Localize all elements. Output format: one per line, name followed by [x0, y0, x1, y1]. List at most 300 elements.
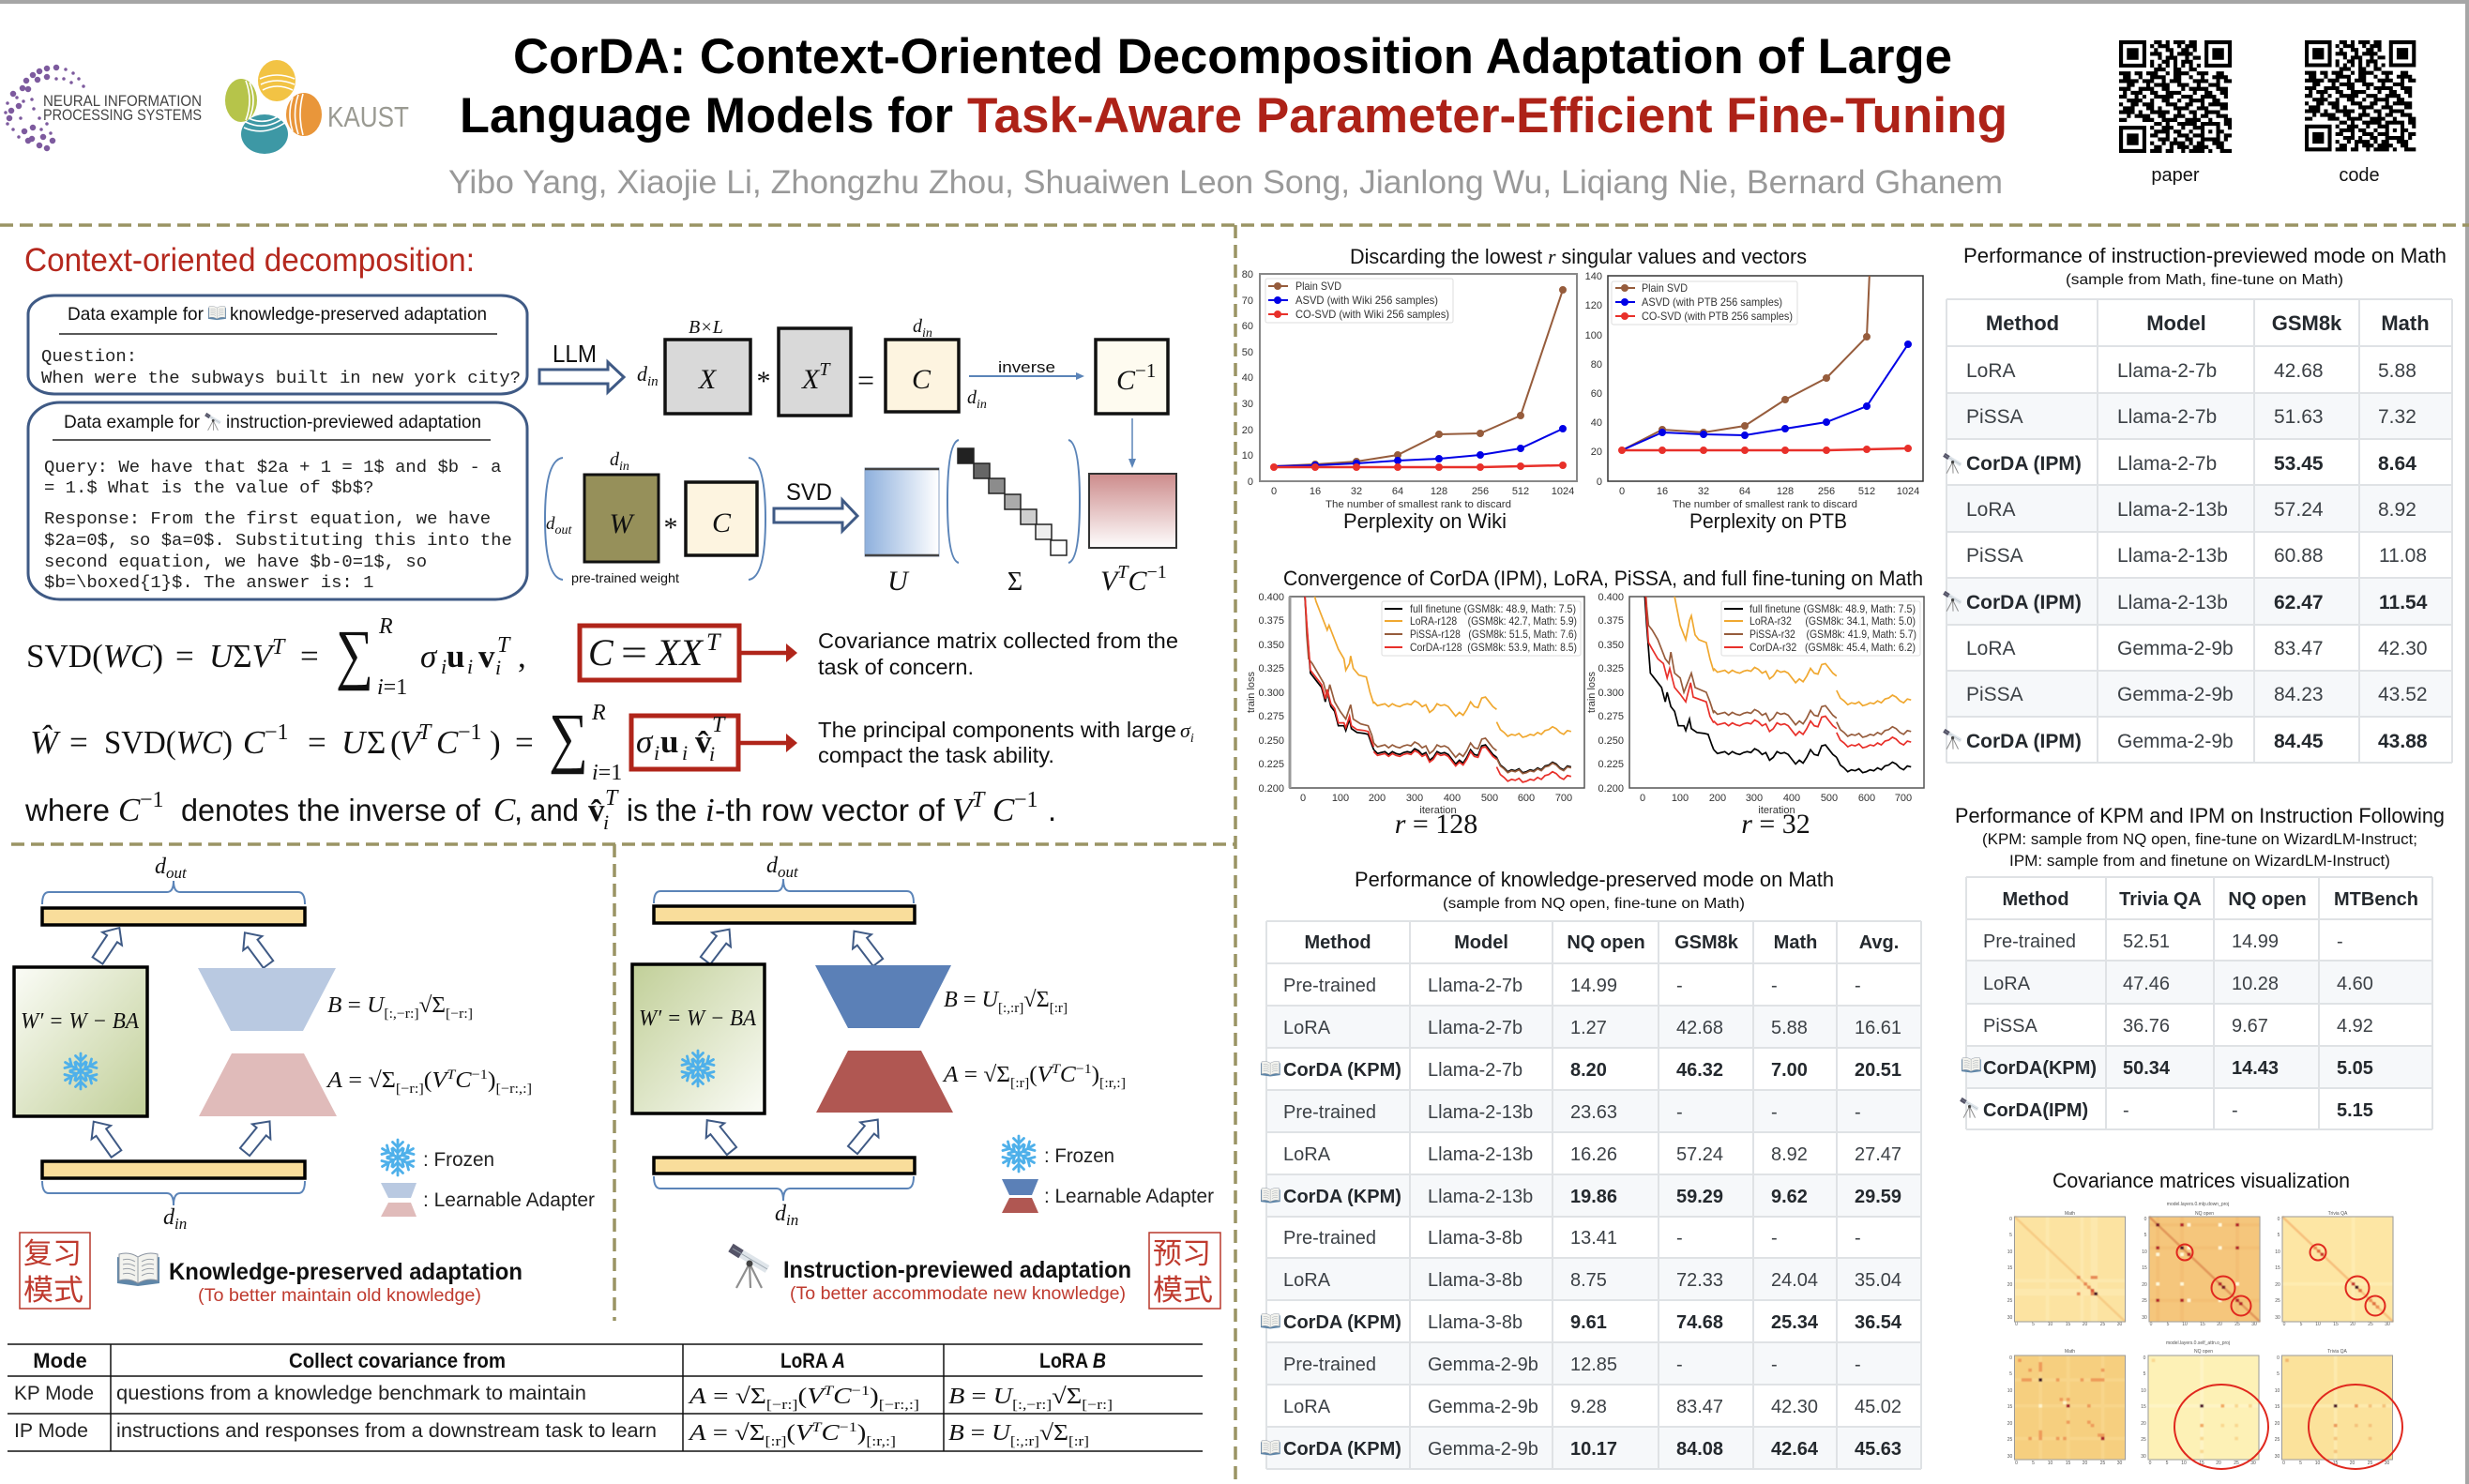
table: knowledge-preserved mode on Math: -: [1676, 1228, 1683, 1249]
title: Task-Aware Parameter-Efficient Fine-Tuning: [967, 88, 2007, 144]
text: where line: C: [493, 792, 516, 828]
panel: knowledge-preserved adaptation diagram: (: [424, 1068, 432, 1093]
table: instruction-previewed mode on Math: 8.92: [2378, 499, 2416, 521]
table: knowledge-preserved mode on Math: Pre-trained: [1283, 976, 1376, 996]
chart: perplexity on PTB: 100: [1585, 330, 1602, 341]
badge: review mode: 模式: [23, 1274, 83, 1307]
callout box: C = XX^T: C: [588, 631, 614, 674]
equation: adapted W: T: [418, 720, 432, 745]
diagram: SVD decomposition: SVD: [786, 479, 832, 506]
table: instruction following: 5.15: [2337, 1100, 2373, 1121]
equation: adapted W: ): [490, 724, 501, 761]
text: where line: T: [605, 786, 619, 810]
heatmap: NQ open row 2: [2141, 1349, 2259, 1466]
panel: instruction-previewed data example: Response: From the first equation, we have: [44, 508, 491, 529]
icon: telescope: [731, 1248, 767, 1288]
arrow: principal components callout: [740, 734, 797, 752]
table: instruction-previewed mode on Math: 5.88: [2378, 360, 2416, 382]
table: mode comparison: (: [786, 1421, 795, 1446]
text: where line: .: [1048, 793, 1056, 827]
chart: perplexity on PTB: 20: [1591, 447, 1602, 458]
logo: NeurIPS: [6, 68, 202, 148]
panel: instruction-previewed data example: Query: We have that $2a + 1 = 1$ and $b - a: [44, 457, 501, 477]
table: mode comparison: [−r:]: [766, 1398, 797, 1413]
chart: convergence r=32: 0.225: [1598, 759, 1624, 770]
diagram: SVD decomposition: U: [887, 566, 910, 597]
table: knowledge-preserved mode on Math: 25.34: [1771, 1312, 1819, 1333]
table: mode comparison: [−r:,:]: [879, 1398, 919, 1413]
diagram: covariance computation: d: [637, 362, 647, 386]
table: mode comparison: [:,:r]: [1010, 1434, 1039, 1449]
table: knowledge-preserved mode on Math: Llama-3-8b: [1428, 1312, 1522, 1333]
table: knowledge-preserved mode on Math: -: [1855, 976, 1861, 996]
table: knowledge-preserved mode on Math: CorDA (KPM): [1283, 1439, 1401, 1460]
table: instruction-previewed mode on Math: 42.30: [2378, 638, 2428, 659]
table: instruction-previewed mode on Math: PiSSA: [1966, 684, 2023, 705]
chart: perplexity on PTB: 40: [1591, 417, 1602, 429]
badge: preview mode: [1149, 1233, 1220, 1309]
table: knowledge-preserved mode on Math: -: [1676, 1355, 1683, 1375]
chart: perplexity on PTB: [1585, 271, 1923, 533]
callout box: sigma u v-hat: v̂: [695, 723, 712, 760]
table: instruction following: 4.60: [2337, 974, 2373, 994]
table: mode comparison: T: [824, 1384, 835, 1399]
table: knowledge-preserved mode on Math: LoRA: [1283, 1144, 1331, 1165]
table: knowledge-preserved mode on Math: 16.61: [1855, 1018, 1901, 1038]
chart: perplexity on PTB: 1024: [1897, 486, 1919, 497]
table: knowledge-preserved mode on Math: 83.47: [1676, 1397, 1723, 1417]
table: instruction-previewed mode on Math: 53.45: [2274, 453, 2324, 475]
table: mode comparison: √Σ: [1039, 1421, 1068, 1446]
table: instruction following: 36.76: [2123, 1016, 2170, 1037]
chart: convergence r=128: CorDA-r128 (GSM8k: 53.9, Math: 8.5): [1410, 641, 1577, 654]
heading: instruction following table: [1955, 804, 2445, 870]
chart: perplexity on Wiki: Plain SVD: [1295, 280, 1341, 293]
label: heatmap row 1 title: model.layers.0.mlp.down_proj: [2167, 1202, 2229, 1207]
table: mode comparison: [:r]: [1068, 1434, 1089, 1449]
heatmap: Math row 2: [2007, 1349, 2126, 1466]
text: principal components explanation: σ: [1180, 719, 1190, 742]
chart: convergence r=32: r = 32: [1741, 809, 1810, 840]
QR code: paper: [2119, 40, 2232, 153]
table: knowledge-preserved mode on Math: 9.61: [1570, 1312, 1607, 1333]
table: knowledge-preserved mode on Math: 5.88: [1771, 1018, 1808, 1038]
panel: instruction-previewed data example: instruction-previewed adaptation: [226, 412, 481, 432]
chart: perplexity on Wiki: Perplexity on Wiki: [1343, 509, 1507, 533]
table: knowledge-preserved mode on Math: Llama-2-7b: [1428, 1060, 1522, 1081]
table: knowledge-preserved mode on Math: Pre-trained: [1283, 1102, 1376, 1123]
equation: adapted W: V: [400, 724, 423, 761]
text: where line: V: [952, 792, 976, 828]
table: instruction-previewed mode on Math: 42.68: [2274, 360, 2324, 382]
chart: convergence r=128: 0: [1300, 793, 1306, 804]
table: knowledge-preserved mode on Math: -: [1855, 1228, 1861, 1249]
chart: perplexity on PTB: Perplexity on PTB: [1689, 509, 1847, 533]
callout box: sigma u v-hat: T: [712, 713, 726, 737]
text: where line: where: [24, 793, 110, 827]
chart: convergence r=128: full finetune (GSM8k: 48.9, Math: 7.5): [1410, 602, 1576, 615]
diagram: covariance computation: C: [1116, 365, 1135, 396]
chart: perplexity on PTB: 512: [1858, 486, 1875, 497]
table: instruction-previewed mode on Math: Model: [2146, 311, 2206, 335]
equation: SVD of WC: σ: [420, 638, 438, 674]
chart: convergence r=128: 0.400: [1258, 592, 1284, 603]
table: instruction following: CorDA(KPM): [1983, 1058, 2097, 1079]
title: Language Models for: [460, 88, 953, 144]
panel: instruction-previewed adaptation diagram: [:r]: [1010, 1076, 1029, 1091]
diagram: SVD decomposition: d: [546, 514, 555, 534]
table: instruction-previewed mode on Math: 57.24: [2274, 499, 2324, 521]
table: instruction following: Trivia QA: [2119, 889, 2202, 910]
text: where line: denotes the inverse of: [181, 793, 481, 827]
table: knowledge-preserved mode on Math: 1.27: [1570, 1018, 1607, 1038]
chart: convergence r=128: 0.375: [1258, 615, 1284, 627]
chart: convergence r=32: 0.350: [1598, 640, 1624, 651]
text: principal components explanation: The principal components with large: [818, 718, 1176, 742]
chart: perplexity on PTB: 16: [1657, 486, 1668, 497]
table: knowledge-preserved mode on Math: Llama-2-7b: [1428, 976, 1522, 996]
table: knowledge-preserved mode on Math: 42.68: [1676, 1018, 1723, 1038]
equation: adapted W: R: [591, 701, 606, 725]
table: mode comparison: questions from a knowledge benchmark to maintain: [116, 1383, 586, 1404]
table: knowledge-preserved mode on Math: -: [1771, 976, 1778, 996]
chart: perplexity on Wiki: 512: [1512, 486, 1529, 497]
chart: perplexity on PTB: 60: [1591, 388, 1602, 400]
equation: adapted W: −1: [458, 720, 482, 745]
table: knowledge-preserved mode on Math: Math: [1774, 932, 1817, 953]
logo: KAUST: KAUST: [327, 100, 409, 133]
table: instruction following: 47.46: [2123, 974, 2170, 994]
diagram: SVD decomposition: out: [555, 523, 572, 538]
panel: knowledge-preserved adaptation diagram: [−r:,:]: [496, 1082, 532, 1097]
chart: perplexity on PTB: 0: [1619, 486, 1625, 497]
heading: instruction-previewed table: Performance of instruction-previewed mode on Math: [1963, 244, 2446, 267]
QR label: paper: paper: [2151, 165, 2200, 186]
heading: knowledge-preserved table: Performance of knowledge-preserved mode on Math: [1355, 868, 1834, 891]
panel: instruction-previewed adaptation diagram: [:r]: [1050, 1001, 1068, 1016]
callout box: C = XX^T: XX: [655, 631, 704, 674]
panel: instruction-previewed adaptation diagram: : Learnable Adapter: [1044, 1186, 1214, 1207]
table: instruction following: -: [2232, 1100, 2238, 1121]
table: knowledge-preserved mode on Math: 14.99: [1570, 976, 1617, 996]
table: instruction-previewed mode on Math: 60.88: [2274, 545, 2324, 567]
table: knowledge-preserved mode on Math: -: [1855, 1102, 1861, 1123]
chart: convergence r=128: r = 128: [1395, 809, 1477, 840]
diagram: covariance computation: −1: [1135, 359, 1156, 382]
table: instruction-previewed mode on Math: CorDA (IPM): [1966, 453, 2082, 475]
table: knowledge-preserved mode on Math: 46.32: [1676, 1060, 1723, 1081]
table: knowledge-preserved mode on Math: LoRA: [1283, 1270, 1331, 1291]
text: where line: [24, 786, 1056, 834]
table: knowledge-preserved mode on Math: -: [1771, 1102, 1778, 1123]
chart: perplexity on Wiki: 32: [1351, 486, 1362, 497]
badge: review mode: [20, 1233, 90, 1309]
chart: perplexity on PTB: 80: [1591, 359, 1602, 371]
diagram: covariance computation: in: [647, 374, 659, 389]
diagram: covariance computation: T: [819, 359, 831, 380]
table: knowledge-preserved mode on Math: -: [1855, 1355, 1861, 1375]
table: instruction following: 14.99: [2232, 931, 2279, 952]
text: covariance explanation: Covariance matrix collected from the: [818, 628, 1178, 653]
table: knowledge-preserved mode on Math: 20.51: [1855, 1060, 1901, 1081]
diagram: covariance computation: inverse: [998, 359, 1055, 376]
chart: convergence r=32: 0.375: [1598, 615, 1624, 627]
chart: perplexity on Wiki: 256: [1472, 486, 1489, 497]
table: knowledge-preserved mode on Math: Pre-trained: [1283, 1228, 1376, 1249]
panel: knowledge-preserved data example: [28, 295, 527, 394]
table: knowledge-preserved mode on Math: 23.63: [1570, 1102, 1617, 1123]
equation: adapted W: SVD(WC): [104, 724, 233, 761]
QR label: code: code: [2339, 165, 2380, 186]
authors: Yibo Yang, Xiaojie Li, Zhongzhu Zhou, Shuaiwen Leon Song, Jianlong Wu, Liqiang Nie, Bernard Ghanem: [448, 164, 2003, 201]
chart: convergence r=32: iteration: [1758, 805, 1795, 816]
diagram: SVD decomposition: in: [619, 460, 629, 474]
table: instruction following: PiSSA: [1983, 1016, 2037, 1037]
table: knowledge-preserved mode on Math: 45.02: [1855, 1397, 1901, 1417]
panel: instruction-previewed data example: = 1.$ What is the value of $b$?: [44, 477, 373, 498]
equation: SVD of WC: =: [300, 638, 319, 674]
table: knowledge-preserved mode on Math: Llama-3-8b: [1428, 1228, 1522, 1249]
heatmap: NQ open row 1: NQ open: [2195, 1211, 2214, 1217]
annotation: red highlight circles: [2174, 1244, 2402, 1469]
callout box: C = XX^T: =: [621, 631, 647, 674]
badge: preview mode: 模式: [1153, 1274, 1213, 1307]
diagram: SVD decomposition: d: [610, 449, 619, 470]
panel: knowledge-preserved adaptation diagram: −1: [472, 1068, 488, 1083]
panel: knowledge-preserved adaptation diagram: d: [163, 1205, 174, 1230]
diagram: SVD decomposition: C: [712, 507, 732, 538]
chart: convergence r=32: 0.275: [1598, 711, 1624, 722]
diagram: SVD decomposition: T: [1117, 562, 1129, 583]
equation: SVD of WC: SVD(WC): [26, 638, 163, 674]
heatmap: NQ open row 1: [2142, 1211, 2260, 1327]
panel: instruction-previewed adaptation diagram: out: [778, 863, 799, 881]
panel: knowledge-preserved data example: knowledge-preserved adaptation: [230, 304, 487, 325]
table: knowledge-preserved mode on Math: 19.86: [1570, 1187, 1617, 1207]
table: knowledge-preserved mode on Math: Avg.: [1859, 932, 1899, 953]
heatmap: Math row 2: Math: [2065, 1349, 2075, 1355]
table: knowledge-preserved mode on Math: 36.54: [1855, 1312, 1902, 1333]
heatmap: Trivia QA row 2: [2275, 1349, 2393, 1466]
diagram: covariance computation: =: [857, 363, 874, 397]
diagram: covariance computation: *: [756, 366, 771, 397]
panel: knowledge-preserved adaptation diagram: ): [488, 1068, 496, 1093]
text: principal components explanation: [818, 718, 1194, 767]
callout box: sigma u v-hat: u: [660, 723, 678, 760]
panel: knowledge-preserved adaptation diagram: [:,−r:]: [384, 1007, 419, 1022]
callout box: sigma u v-hat: [631, 713, 738, 769]
table: instruction-previewed mode on Math: GSM8k: [2272, 311, 2342, 335]
chart: convergence r=32: train loss: [1586, 671, 1598, 713]
table: knowledge-preserved mode on Math: 84.08: [1676, 1439, 1723, 1460]
table: mode comparison: Collect covariance from: [289, 1349, 506, 1372]
table: instruction-previewed mode on Math: Gemma-2-9b: [2117, 638, 2234, 659]
table: knowledge-preserved mode on Math: Pre-trained: [1283, 1355, 1376, 1375]
chart: perplexity on Wiki: 20: [1242, 425, 1253, 436]
table: knowledge-preserved mode on Math: Llama-2-13b: [1428, 1187, 1533, 1207]
panel: instruction-previewed adaptation diagram: (: [1029, 1063, 1038, 1087]
equation: SVD of WC: R: [378, 614, 393, 639]
chart: convergence r=128: 0.350: [1258, 640, 1284, 651]
chart: convergence r=128: 100: [1332, 793, 1349, 804]
text: where line: and: [530, 793, 579, 827]
table: instruction-previewed mode on Math: 8.64: [2378, 453, 2416, 475]
chart: convergence r=32: 0.325: [1598, 663, 1624, 674]
table: instruction-previewed mode on Math: LoRA: [1966, 499, 2016, 521]
table: instruction-previewed mode on Math: 51.63: [2274, 406, 2324, 428]
panel: instruction-previewed adaptation diagram: C: [1060, 1063, 1077, 1087]
equation: SVD of WC: u: [447, 638, 464, 674]
table: knowledge-preserved mode on Math: -: [1771, 1228, 1778, 1249]
table: instruction-previewed mode on Math: [1944, 299, 2452, 763]
diagram: SVD decomposition: *: [664, 512, 677, 543]
chart: convergence r=128: 700: [1555, 793, 1572, 804]
chart: convergence r=32: 700: [1895, 793, 1912, 804]
equation: adapted W: [30, 700, 622, 785]
table: instruction following: MTBench: [2334, 889, 2418, 910]
label: heatmap row 2 title: model.layers.0.self_attn.o_proj: [2166, 1340, 2230, 1346]
table: knowledge-preserved mode on Math: 12.85: [1570, 1355, 1617, 1375]
table: knowledge-preserved mode on Math: Gemma-2-9b: [1428, 1355, 1538, 1375]
panel: knowledge-preserved data example: When were the subways built in new york city?: [41, 368, 521, 388]
table: mode comparison: C: [822, 1421, 841, 1446]
table: knowledge-preserved mode on Math: Llama-2-13b: [1428, 1144, 1533, 1165]
panel: instruction-previewed adaptation diagram: ): [1092, 1063, 1099, 1087]
panel: knowledge-preserved data example: Data example for: [68, 304, 204, 325]
chart: perplexity on Wiki: 10: [1242, 450, 1253, 462]
panel: instruction-previewed adaptation diagram: V: [1038, 1063, 1054, 1087]
chart: convergence r=32: 0: [1640, 793, 1645, 804]
chart: perplexity on PTB: 128: [1777, 486, 1794, 497]
equation: SVD of WC: i=1: [377, 675, 407, 700]
chart: perplexity on Wiki: 16: [1310, 486, 1321, 497]
panel: knowledge-preserved adaptation diagram: C: [455, 1068, 473, 1093]
chart: convergence r=32: 0.250: [1598, 735, 1624, 747]
table: instruction following: 50.34: [2123, 1058, 2171, 1079]
heading: instruction-previewed adaptation: Instruction-previewed adaptation: [783, 1257, 1131, 1283]
table: instruction following: 10.28: [2232, 974, 2279, 994]
text: covariance explanation: [818, 628, 1178, 679]
chart: perplexity on Wiki: 64: [1392, 486, 1403, 497]
table: knowledge-preserved mode on Math: LoRA: [1283, 1397, 1331, 1417]
table: knowledge-preserved mode on Math: LoRA: [1283, 1018, 1331, 1038]
heatmap: Math row 1: [2007, 1211, 2126, 1327]
chart: convergence r=128: 0.275: [1258, 711, 1284, 722]
table: instruction-previewed mode on Math: Llama-2-13b: [2117, 545, 2228, 567]
diagram: covariance computation: d: [967, 387, 977, 408]
table: instruction-previewed mode on Math: 43.88: [2378, 731, 2428, 752]
table: knowledge-preserved mode on Math: Gemma-2-9b: [1428, 1439, 1538, 1460]
table: mode comparison: LoRA A: [780, 1349, 845, 1372]
chart: perplexity on PTB: CO-SVD (with PTB 256 samples): [1642, 310, 1793, 323]
heatmap: Math row 1: Math: [2065, 1211, 2075, 1217]
chart: perplexity on Wiki: 70: [1242, 295, 1253, 307]
chart: convergence r=32: full finetune (GSM8k: 48.9, Math: 7.5): [1750, 602, 1916, 615]
table: mode comparison: instructions and responses from a downstream task to learn: [116, 1420, 657, 1442]
panel: knowledge-preserved adaptation diagram: B = U: [327, 993, 384, 1018]
table: instruction-previewed mode on Math: CorDA (IPM): [1966, 592, 2082, 613]
table: knowledge-preserved mode on Math: Method: [1304, 932, 1371, 953]
logo: NeurIPS: NEURAL INFORMATION: [43, 93, 202, 110]
table: mode comparison: B = U: [948, 1385, 1009, 1409]
text: where line: i: [705, 792, 715, 828]
panel: instruction-previewed adaptation diagram: −1: [1076, 1062, 1092, 1077]
table: instruction following: CorDA(IPM): [1983, 1100, 2088, 1121]
chart: convergence r=32: CorDA-r32 (GSM8k: 45.4, Math: 6.2): [1750, 641, 1916, 654]
equation: adapted W: Σ: [367, 724, 386, 761]
heading: covariance matrices: Covariance matrices visualization: [2052, 1169, 2350, 1192]
table: knowledge-preserved mode on Math: -: [1676, 1102, 1683, 1123]
table: instruction-previewed mode on Math: 7.32: [2378, 406, 2416, 428]
diagram: covariance computation: [539, 316, 1168, 468]
equation: SVD of WC: i: [467, 655, 473, 678]
table: instruction following: 4.92: [2337, 1016, 2373, 1037]
text: principal components explanation: compact the task ability.: [818, 743, 1054, 767]
heading: instruction-previewed adaptation: (To better accommodate new knowledge): [790, 1284, 1126, 1304]
panel: knowledge-preserved adaptation diagram: W′ = W − BA: [21, 1009, 139, 1034]
equation: adapted W: =: [515, 724, 534, 761]
chart: convergence r=32: LoRA-r32 (GSM8k: 34.1, Math: 5.0): [1750, 614, 1916, 628]
table: knowledge-preserved mode on Math: Gemma-2-9b: [1428, 1397, 1538, 1417]
text: covariance explanation: task of concern.: [818, 655, 974, 679]
equation: adapted W: C: [243, 724, 265, 761]
chart: perplexity on Wiki: 0: [1271, 486, 1277, 497]
panel: instruction-previewed adaptation diagram: B = U: [944, 988, 998, 1012]
title: [460, 29, 2007, 144]
table: instruction following: -: [2337, 931, 2343, 952]
QR code: code: [2305, 40, 2416, 151]
panel: instruction-previewed adaptation diagram: [:,:r]: [998, 1001, 1023, 1016]
table: instruction-previewed mode on Math: Method: [1986, 311, 2059, 335]
chart: convergence r=128: [1247, 593, 1585, 833]
equation: SVD of WC: T: [272, 635, 286, 659]
heading: convergence: Convergence of CorDA (IPM), LoRA, PiSSA, and full fine-tuning on Math: [1283, 567, 1923, 590]
text: where line: C: [118, 792, 141, 828]
heading: knowledge-preserved adaptation: Knowledge-preserved adaptation: [169, 1259, 523, 1285]
table: knowledge-preserved mode on Math: CorDA (KPM): [1283, 1060, 1401, 1081]
equation: adapted W: ∑: [549, 700, 588, 775]
equation: adapted W: =: [308, 724, 326, 761]
table: knowledge-preserved mode on Math: -: [1676, 976, 1683, 996]
title: CorDA: Context-Oriented Decomposition Adaptation of Large: [513, 29, 1952, 84]
table: mode comparison: (: [797, 1385, 807, 1409]
callout box: sigma u v-hat: σ: [636, 723, 654, 760]
table: instruction-previewed mode on Math: 43.52: [2378, 684, 2428, 705]
diagram: SVD decomposition: [545, 440, 1176, 597]
chart: perplexity on PTB: 0: [1597, 477, 1602, 488]
table: mode comparison: ): [857, 1421, 866, 1446]
chart: perplexity on Wiki: The number of smallest rank to discard: [1325, 499, 1511, 510]
table: knowledge-preserved mode on Math: Llama-2-7b: [1428, 1018, 1522, 1038]
diagram: SVD decomposition: V: [1100, 566, 1117, 597]
chart: perplexity on Wiki: 60: [1242, 321, 1253, 332]
table: knowledge-preserved mode on Math: 13.41: [1570, 1228, 1617, 1249]
table: instruction-previewed mode on Math: CorDA (IPM): [1966, 731, 2082, 752]
table: mode comparison: [8, 1344, 1203, 1451]
panel: knowledge-preserved adaptation diagram: [−r:]: [396, 1082, 424, 1097]
chart: convergence r=32: 0.300: [1598, 688, 1624, 699]
panel: instruction-previewed adaptation diagram: d: [766, 854, 778, 878]
table: instruction-previewed mode on Math: Llama-2-7b: [2117, 453, 2217, 475]
table: knowledge-preserved mode on Math: 42.30: [1771, 1397, 1818, 1417]
table: instruction-previewed mode on Math: PiSSA: [1966, 545, 2023, 567]
panel: knowledge-preserved adaptation diagram: [14, 855, 595, 1233]
text: where line: v̂: [588, 792, 605, 828]
table: mode comparison: LoRA B: [1039, 1349, 1106, 1372]
table: knowledge-preserved mode on Math: 35.04: [1855, 1270, 1901, 1291]
panel: knowledge-preserved adaptation diagram: d: [155, 855, 166, 879]
table: instruction-previewed mode on Math: Llama-2-13b: [2117, 592, 2228, 613]
